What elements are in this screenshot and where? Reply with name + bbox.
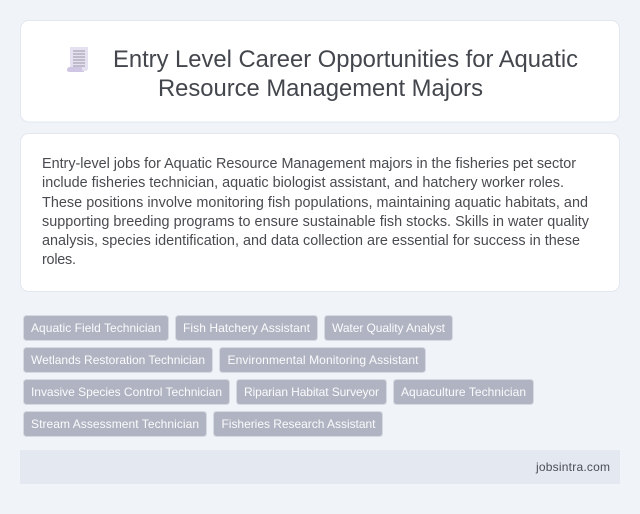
tag: Water Quality Analyst bbox=[324, 316, 452, 340]
tag: Riparian Habitat Surveyor bbox=[236, 380, 386, 404]
description text: include fisheries technician, aquatic biologist assistant, and hatchery worker roles. bbox=[42, 175, 564, 191]
tag: Stream Assessment Technician bbox=[24, 412, 206, 436]
footer bar bbox=[20, 450, 620, 484]
tag: Invasive Species Control Technician bbox=[24, 380, 230, 404]
tag: Environmental Monitoring Assistant: Environmental Monitoring Assistant bbox=[228, 353, 419, 367]
footer text: source: jobsintra.com bbox=[535, 460, 610, 474]
tag: Fish Hatchery Assistant: Fish Hatchery Assistant bbox=[183, 321, 311, 335]
tag: Aquatic Field Technician: Aquatic Field Technician bbox=[31, 321, 161, 335]
description text: These positions involve monitoring fish populations, maintaining aquatic habitats, and bbox=[42, 195, 588, 211]
tag: Aquatic Field Technician bbox=[24, 316, 168, 340]
tag: Riparian Habitat Surveyor: Riparian Habitat Surveyor bbox=[244, 385, 379, 399]
tag: Fish Hatchery Assistant bbox=[176, 316, 318, 340]
tag: Aquaculture Technician: Aquaculture Technician bbox=[401, 385, 526, 399]
tag: Aquaculture Technician bbox=[394, 380, 534, 404]
tag: Stream Assessment Technician: Stream Assessment Technician bbox=[31, 417, 199, 431]
icon: paper scroll bbox=[67, 47, 88, 72]
tag: Fisheries Research Assistant bbox=[214, 412, 382, 436]
description text: Entry-level jobs for Aquatic Resource Management majors in the fisheries pet sector bbox=[42, 156, 576, 172]
title bbox=[113, 46, 578, 102]
description text: supporting breeding programs to ensure sustainable fish stocks. Skills in water quality bbox=[42, 214, 590, 230]
tag: Water Quality Analyst: Water Quality Analyst bbox=[332, 321, 446, 335]
description text: analysis, species identification, and data collection are essential for success in these bbox=[42, 233, 580, 249]
tag list bbox=[24, 316, 534, 436]
panel: description bbox=[20, 134, 620, 292]
title: Entry Level Career Opportunities for Aquatic bbox=[113, 46, 578, 73]
description text bbox=[42, 156, 590, 268]
tag: Wetlands Restoration Technician: Wetlands Restoration Technician bbox=[31, 353, 205, 367]
tag: Fisheries Research Assistant: Fisheries Research Assistant bbox=[222, 417, 376, 431]
panel: title card bbox=[20, 20, 620, 122]
tag: Invasive Species Control Technician: Invasive Species Control Technician bbox=[31, 385, 222, 399]
tag: Wetlands Restoration Technician bbox=[24, 348, 212, 372]
description text: roles. bbox=[42, 252, 76, 268]
tag: Environmental Monitoring Assistant bbox=[220, 348, 426, 372]
title: Resource Management Majors bbox=[158, 75, 483, 102]
